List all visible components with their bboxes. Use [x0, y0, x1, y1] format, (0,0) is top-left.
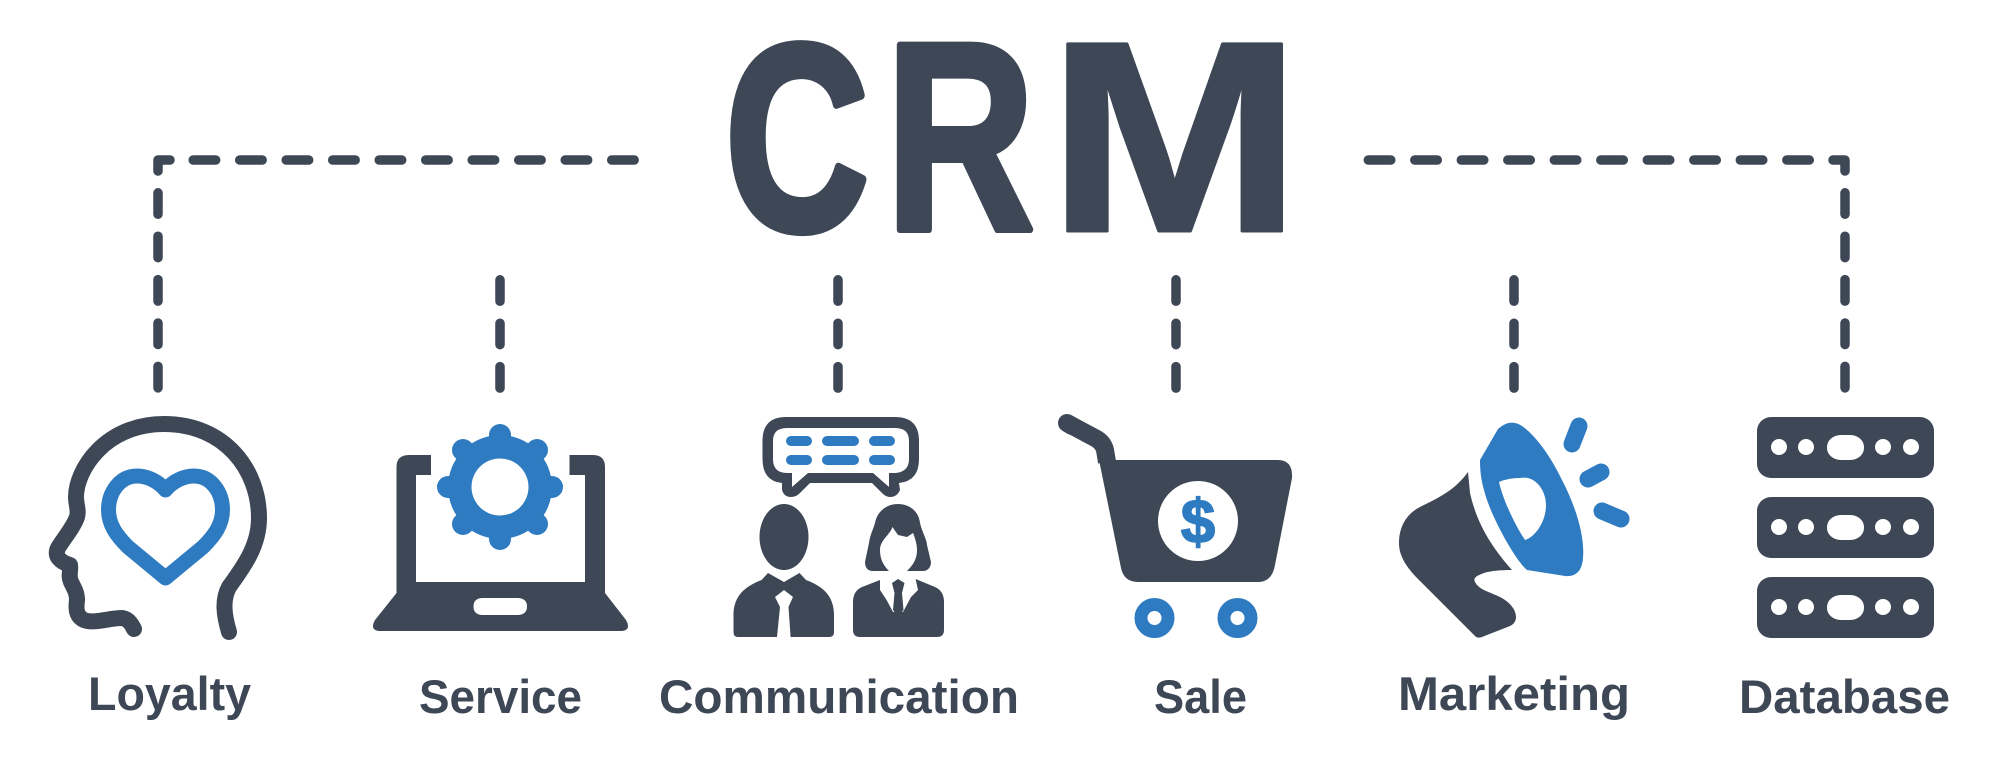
label: Database: Database	[1739, 670, 1950, 723]
dollar sign: $	[1181, 488, 1215, 557]
heart	[108, 476, 222, 578]
megaphone bell	[1480, 423, 1583, 576]
laptop	[373, 455, 628, 631]
sound waves	[1572, 426, 1621, 519]
server row 1	[1757, 417, 1934, 478]
woman	[853, 504, 944, 637]
megaphone handle and cone	[1399, 472, 1516, 638]
connector: left bracket to Loyalty	[158, 160, 635, 390]
server row 3	[1757, 577, 1934, 638]
connector: Sale	[1171, 280, 1181, 390]
icon: megaphone (Marketing)	[1399, 423, 1621, 638]
connector: Service	[495, 280, 505, 390]
icon: two people with speech bubble (Communication)	[734, 417, 944, 637]
speech bubble interior	[773, 428, 909, 487]
wheels	[1141, 604, 1251, 632]
label: Communication: Communication	[659, 670, 1019, 723]
icon: head with heart (Loyalty)	[57, 424, 259, 632]
cart handle	[1067, 423, 1107, 462]
icon: shopping cart with dollar (Sale)	[1067, 423, 1292, 632]
title: C	[726, 0, 868, 286]
gear	[448, 435, 552, 539]
connector: right bracket to Database	[1368, 160, 1845, 390]
speech bubble outline	[762, 417, 919, 497]
label: Marketing: Marketing	[1398, 667, 1630, 720]
label: Service: Service	[419, 670, 582, 723]
cart basket	[1098, 455, 1292, 582]
icon: laptop with gear (Service)	[373, 435, 628, 631]
man	[734, 504, 834, 637]
label: Loyalty: Loyalty	[88, 667, 251, 720]
label: Sale: Sale	[1154, 670, 1247, 723]
icon: database servers (Database)	[1757, 417, 1934, 638]
chat lines	[786, 436, 895, 465]
server row 2	[1757, 497, 1934, 558]
connector: Marketing	[1509, 280, 1519, 390]
title	[726, 0, 1302, 289]
coin	[1158, 481, 1238, 561]
connector: Communication	[833, 280, 843, 390]
head outline	[57, 424, 259, 632]
